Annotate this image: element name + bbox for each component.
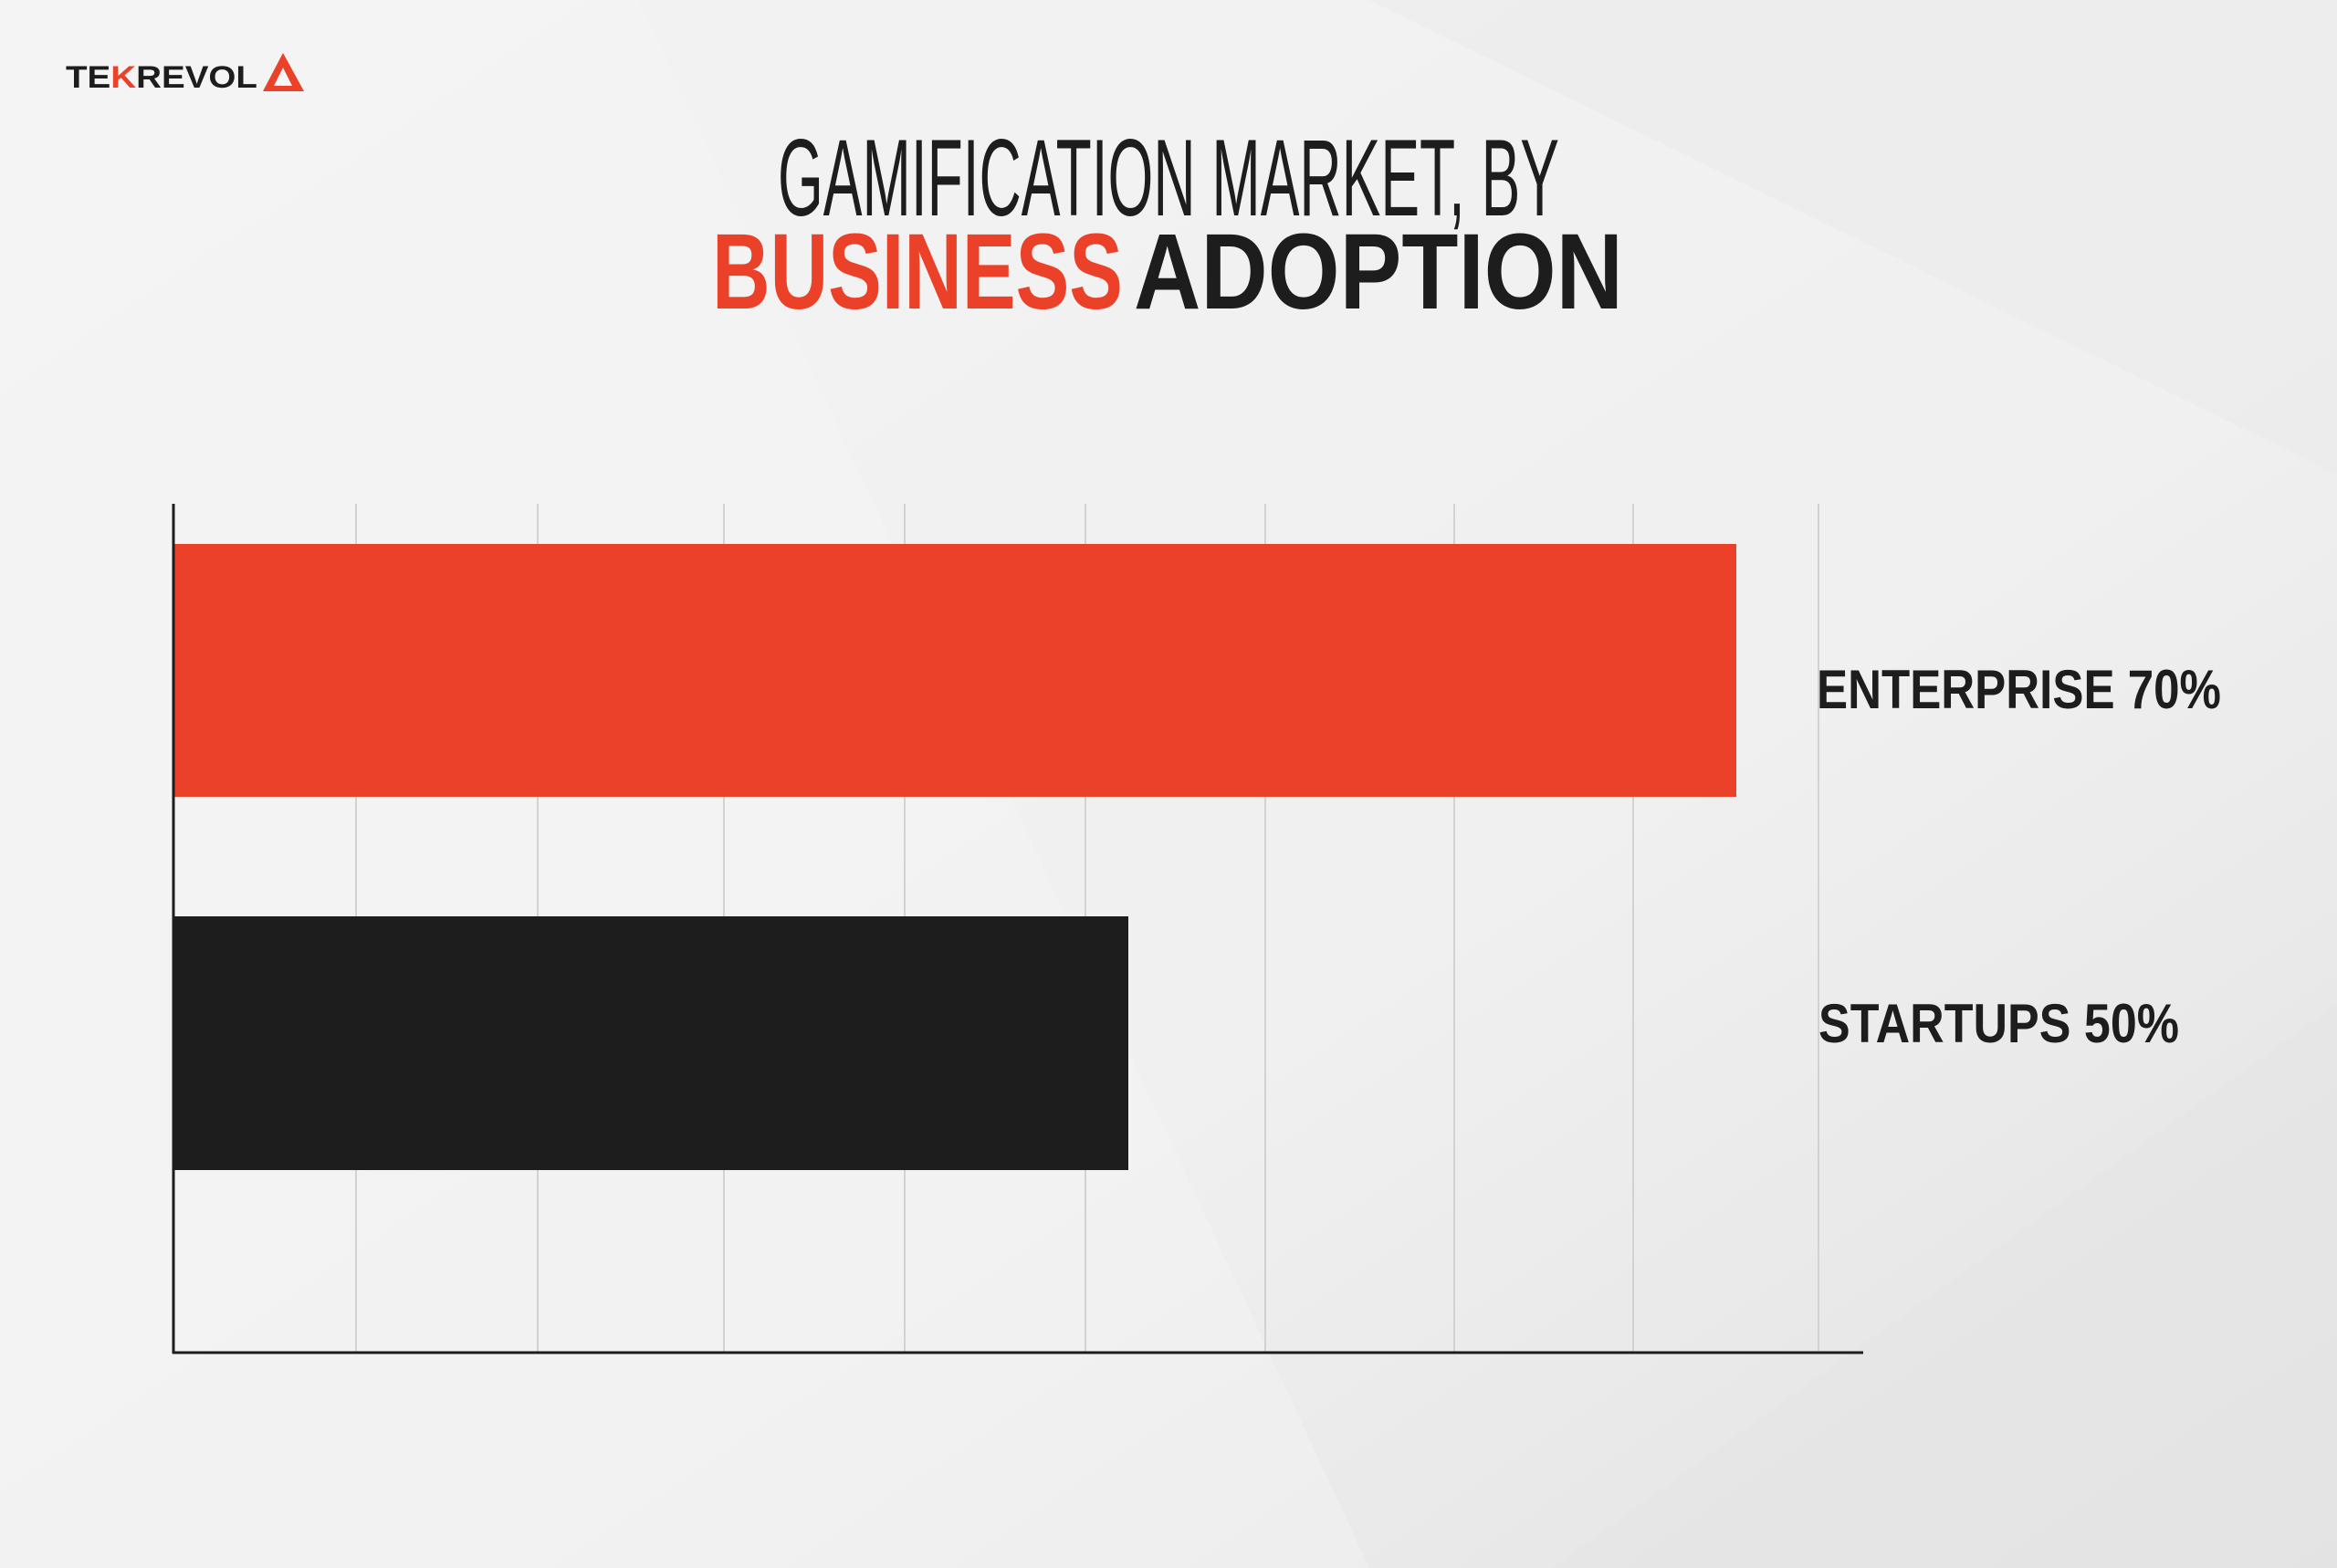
bar: enterprise [173,544,1736,797]
title: BUSINESS [712,212,1123,332]
logo: TEKREVOL [66,60,257,95]
title: ADOPTION [1134,212,1623,332]
title: GAMIFICATION MARKET, BY [778,117,1559,239]
bar: startups [173,916,1128,1170]
label: enterprise: ENTERPRISE 70% [1817,659,2221,720]
title [712,117,1623,332]
bar chart [173,504,2221,1354]
logo [66,53,304,95]
label: startups: STARTUPS 50% [1818,993,2179,1054]
